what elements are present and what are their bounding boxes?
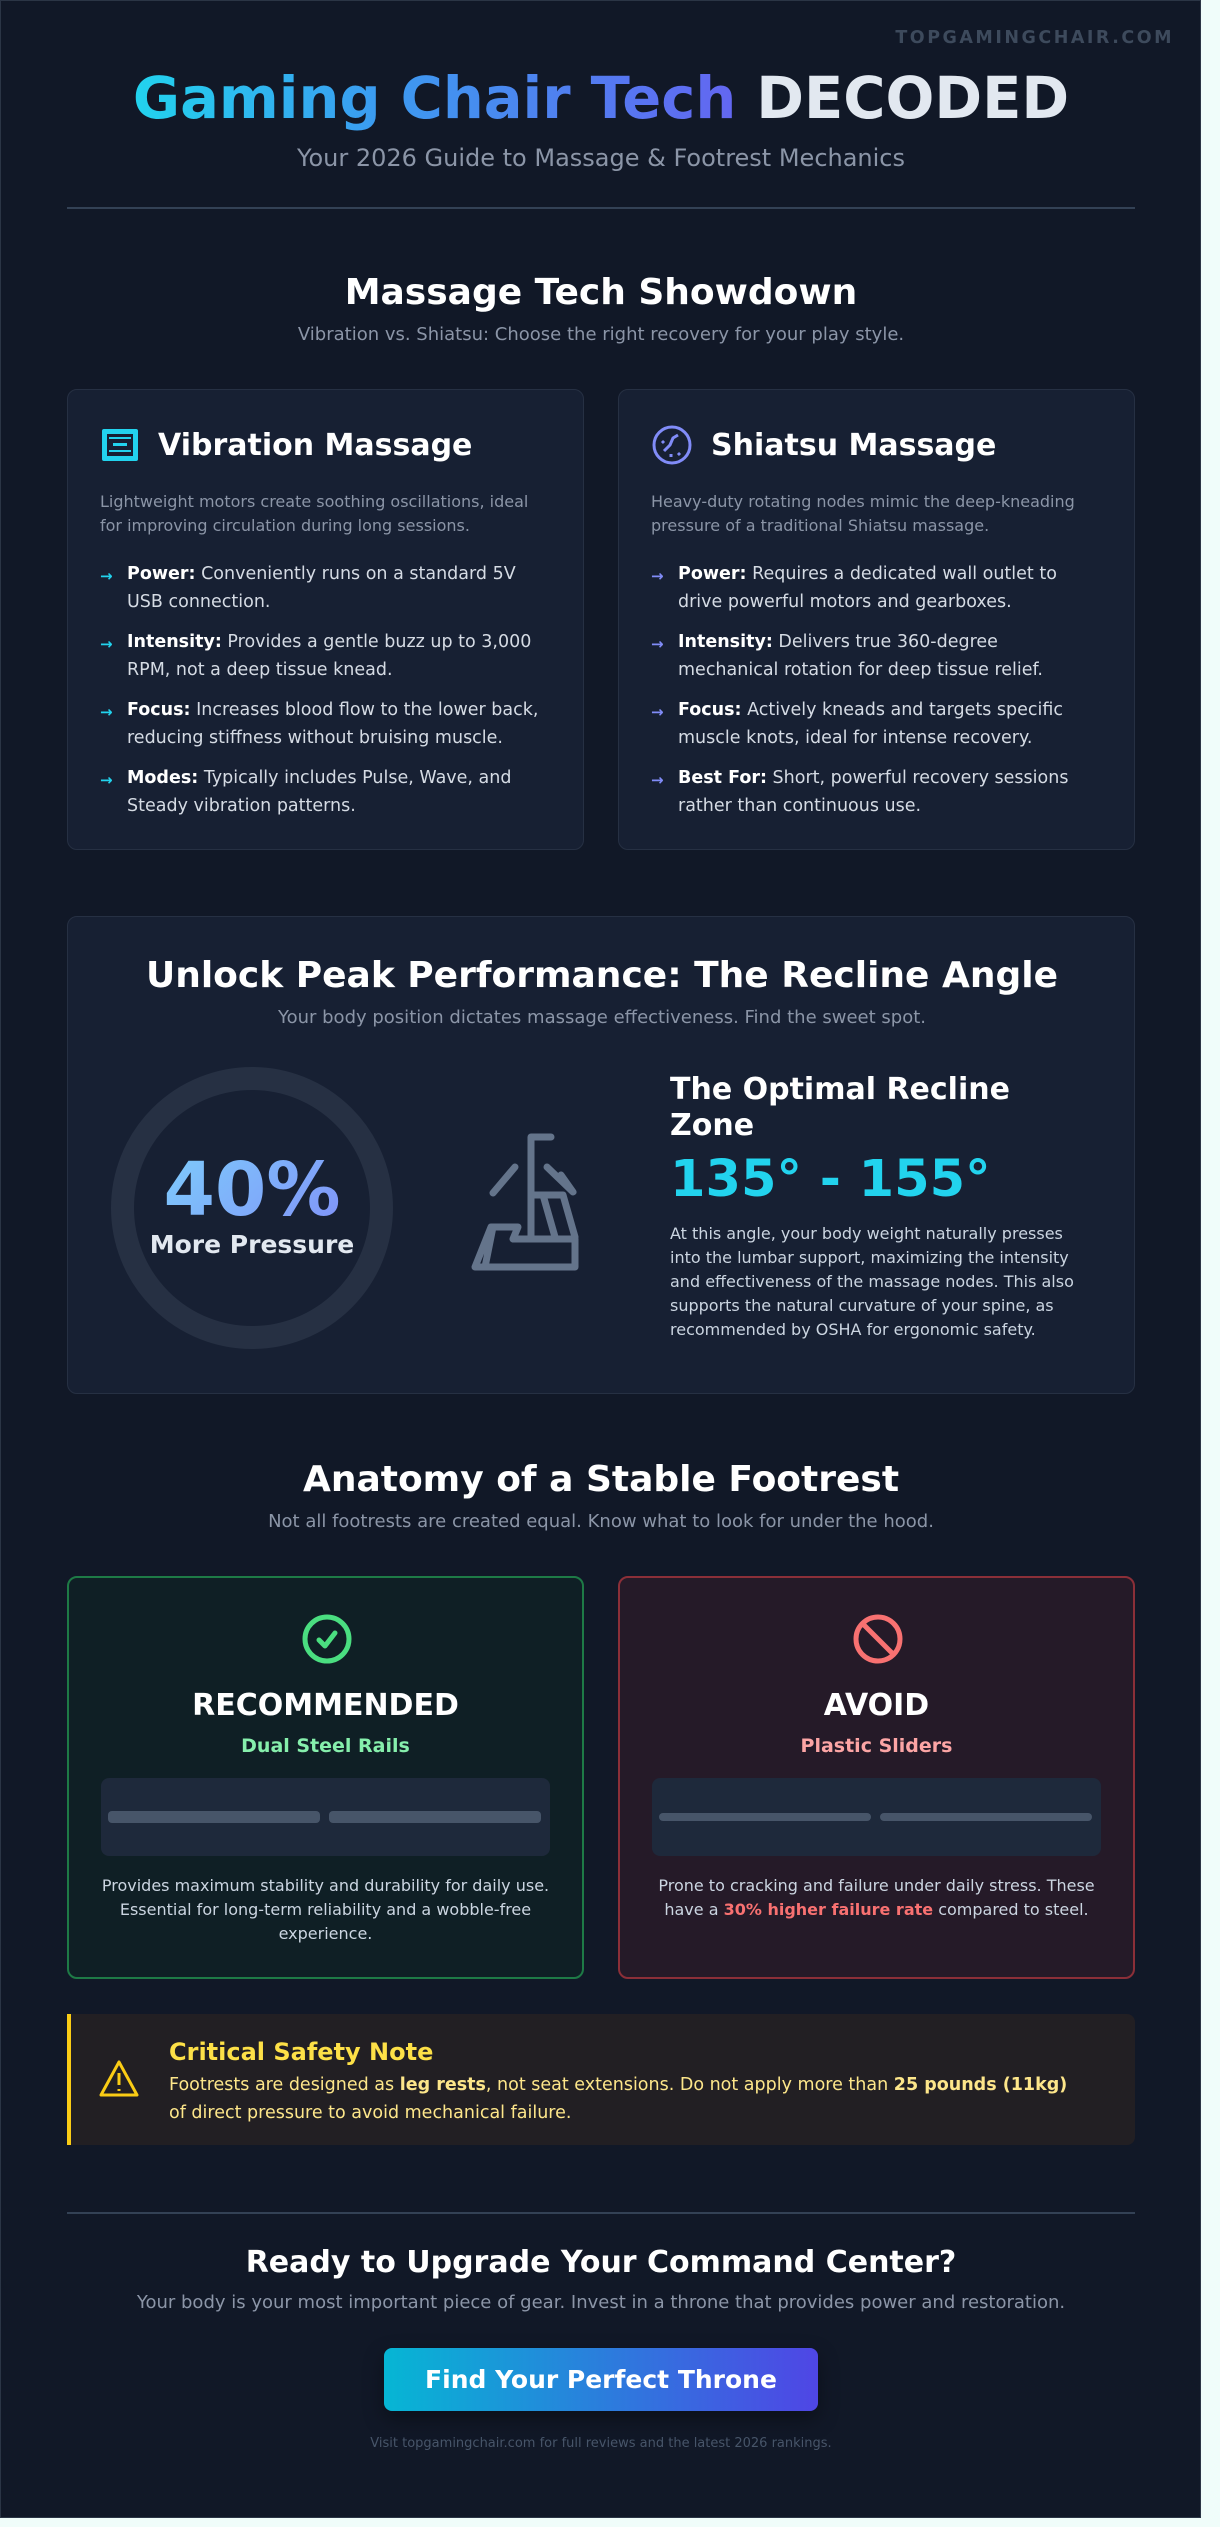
ring stat — [111, 1067, 393, 1349]
button: Find Your Perfect Throne — [425, 2365, 777, 2394]
callout: safety — [67, 2014, 1135, 2145]
panel: recommended — [67, 1576, 584, 1979]
icon: ban — [854, 1614, 902, 1664]
icon: warning — [100, 2060, 139, 2096]
bullet list: Focus: Increases blood flow to the lower back, reducing stiffness without bruising muscle. — [127, 700, 538, 748]
safety title: Critical Safety Note — [169, 2038, 433, 2066]
card title vibration: Vibration Massage — [158, 428, 472, 462]
bullet list: → — [100, 771, 113, 789]
label: RECOMMENDED — [192, 1688, 459, 1723]
footer note: Visit topgamingchair.com for full reviews and the latest 2026 rankings. — [370, 2436, 832, 2451]
watermark: TOPGAMINGCHAIR.COM — [895, 28, 1174, 48]
bullet list: → — [651, 635, 664, 653]
button — [384, 2348, 818, 2411]
bullet list: Intensity: Delivers true 360-degree mechanical rotation for deep tissue relief. — [678, 632, 1043, 680]
bullet list: Focus: Actively kneads and targets specific muscle knots, ideal for intense recovery. — [678, 700, 1063, 748]
recline sub: Your body position dictates massage effectiveness. Find the sweet spot. — [278, 1007, 926, 1028]
rails graphic — [101, 1778, 550, 1856]
subtitle: Your 2026 Guide to Massage & Footrest Mechanics — [297, 144, 905, 172]
subheading: Vibration vs. Shiatsu: Choose the right recovery for your play style. — [298, 324, 904, 345]
panel: shiatsu — [618, 389, 1135, 850]
bullet list: Power: Requires a dedicated wall outlet to drive powerful motors and gearboxes. — [678, 564, 1057, 612]
bullet list: → — [651, 567, 664, 585]
recline text: The Optimal Recline Zone — [670, 1072, 1010, 1143]
bullet list: Modes: Typically includes Pulse, Wave, and Steady vibration patterns. — [127, 768, 511, 816]
bullet list: → — [651, 771, 664, 789]
heading: massage showdown: Massage Tech Showdown — [345, 272, 857, 313]
bullet list: Power: Conveniently runs on a standard 5V USB connection. — [127, 564, 516, 612]
card title shiatsu: Shiatsu Massage — [711, 428, 996, 462]
sublabel: Dual Steel Rails — [241, 1735, 410, 1757]
footrest sub: Not all footrests are created equal. Know what to look for under the hood. — [268, 1511, 934, 1532]
bullet list — [651, 564, 1068, 816]
rails graphic — [652, 1778, 1101, 1856]
icon: check — [302, 1614, 352, 1664]
bullet list: → — [100, 567, 113, 585]
recline text: 135° - 155° — [670, 1150, 991, 1209]
recline text — [670, 1072, 1074, 1339]
desc: Lightweight motors create soothing oscillations, ideal for improving circulation during long sessions. — [100, 492, 528, 535]
ring stat: More Pressure — [150, 1230, 354, 1259]
text: Prone to cracking and failure under daily stress. These have a 30% higher failure rate compared to steel. — [658, 1876, 1095, 1919]
icon: chair — [472, 1134, 578, 1270]
recline text: At this angle, your body weight naturally presses into the lumbar support, maximizing the intensity and effectiveness of the massage nodes. This also supports the natural curvature of your spine, as recommended by OSHA for ergonomic safety. — [670, 1224, 1074, 1339]
bullet list: → — [100, 635, 113, 653]
cta heading: Ready to Upgrade Your Command Center? — [246, 2245, 956, 2280]
heading: footrest: Anatomy of a Stable Footrest — [303, 1459, 899, 1500]
ring stat: 40% — [163, 1147, 341, 1233]
bullet list: → — [100, 703, 113, 721]
desc: Heavy-duty rotating nodes mimic the deep-kneading pressure of a traditional Shiatsu massage. — [651, 492, 1075, 535]
bullet list — [100, 564, 538, 816]
bullet list: → — [651, 703, 664, 721]
label: AVOID — [824, 1688, 929, 1723]
title: Gaming Chair Tech DECODED — [133, 65, 1069, 132]
recline heading: Unlock Peak Performance: The Recline Angle — [146, 955, 1058, 996]
bullet list: Intensity: Provides a gentle buzz up to 3,000 RPM, not a deep tissue knead. — [127, 632, 531, 680]
text: Provides maximum stability and durability for daily use. Essential for long-term reliability and a wobble-free experience. — [102, 1876, 549, 1943]
cta sub: Your body is your most important piece of gear. Invest in a throne that provides power and restoration. — [137, 2292, 1065, 2313]
panel: vibration — [67, 389, 584, 850]
panel: avoid — [618, 1576, 1135, 1979]
bullet list: Best For: Short, powerful recovery sessions rather than continuous use. — [678, 768, 1068, 816]
safety text: Footrests are designed as leg rests, not seat extensions. Do not apply more than 25 pounds (11kg) of direct pressure to avoid mechanical failure. — [169, 2075, 1067, 2123]
panel: recline — [67, 916, 1135, 1394]
sublabel: Plastic Sliders — [801, 1735, 952, 1757]
